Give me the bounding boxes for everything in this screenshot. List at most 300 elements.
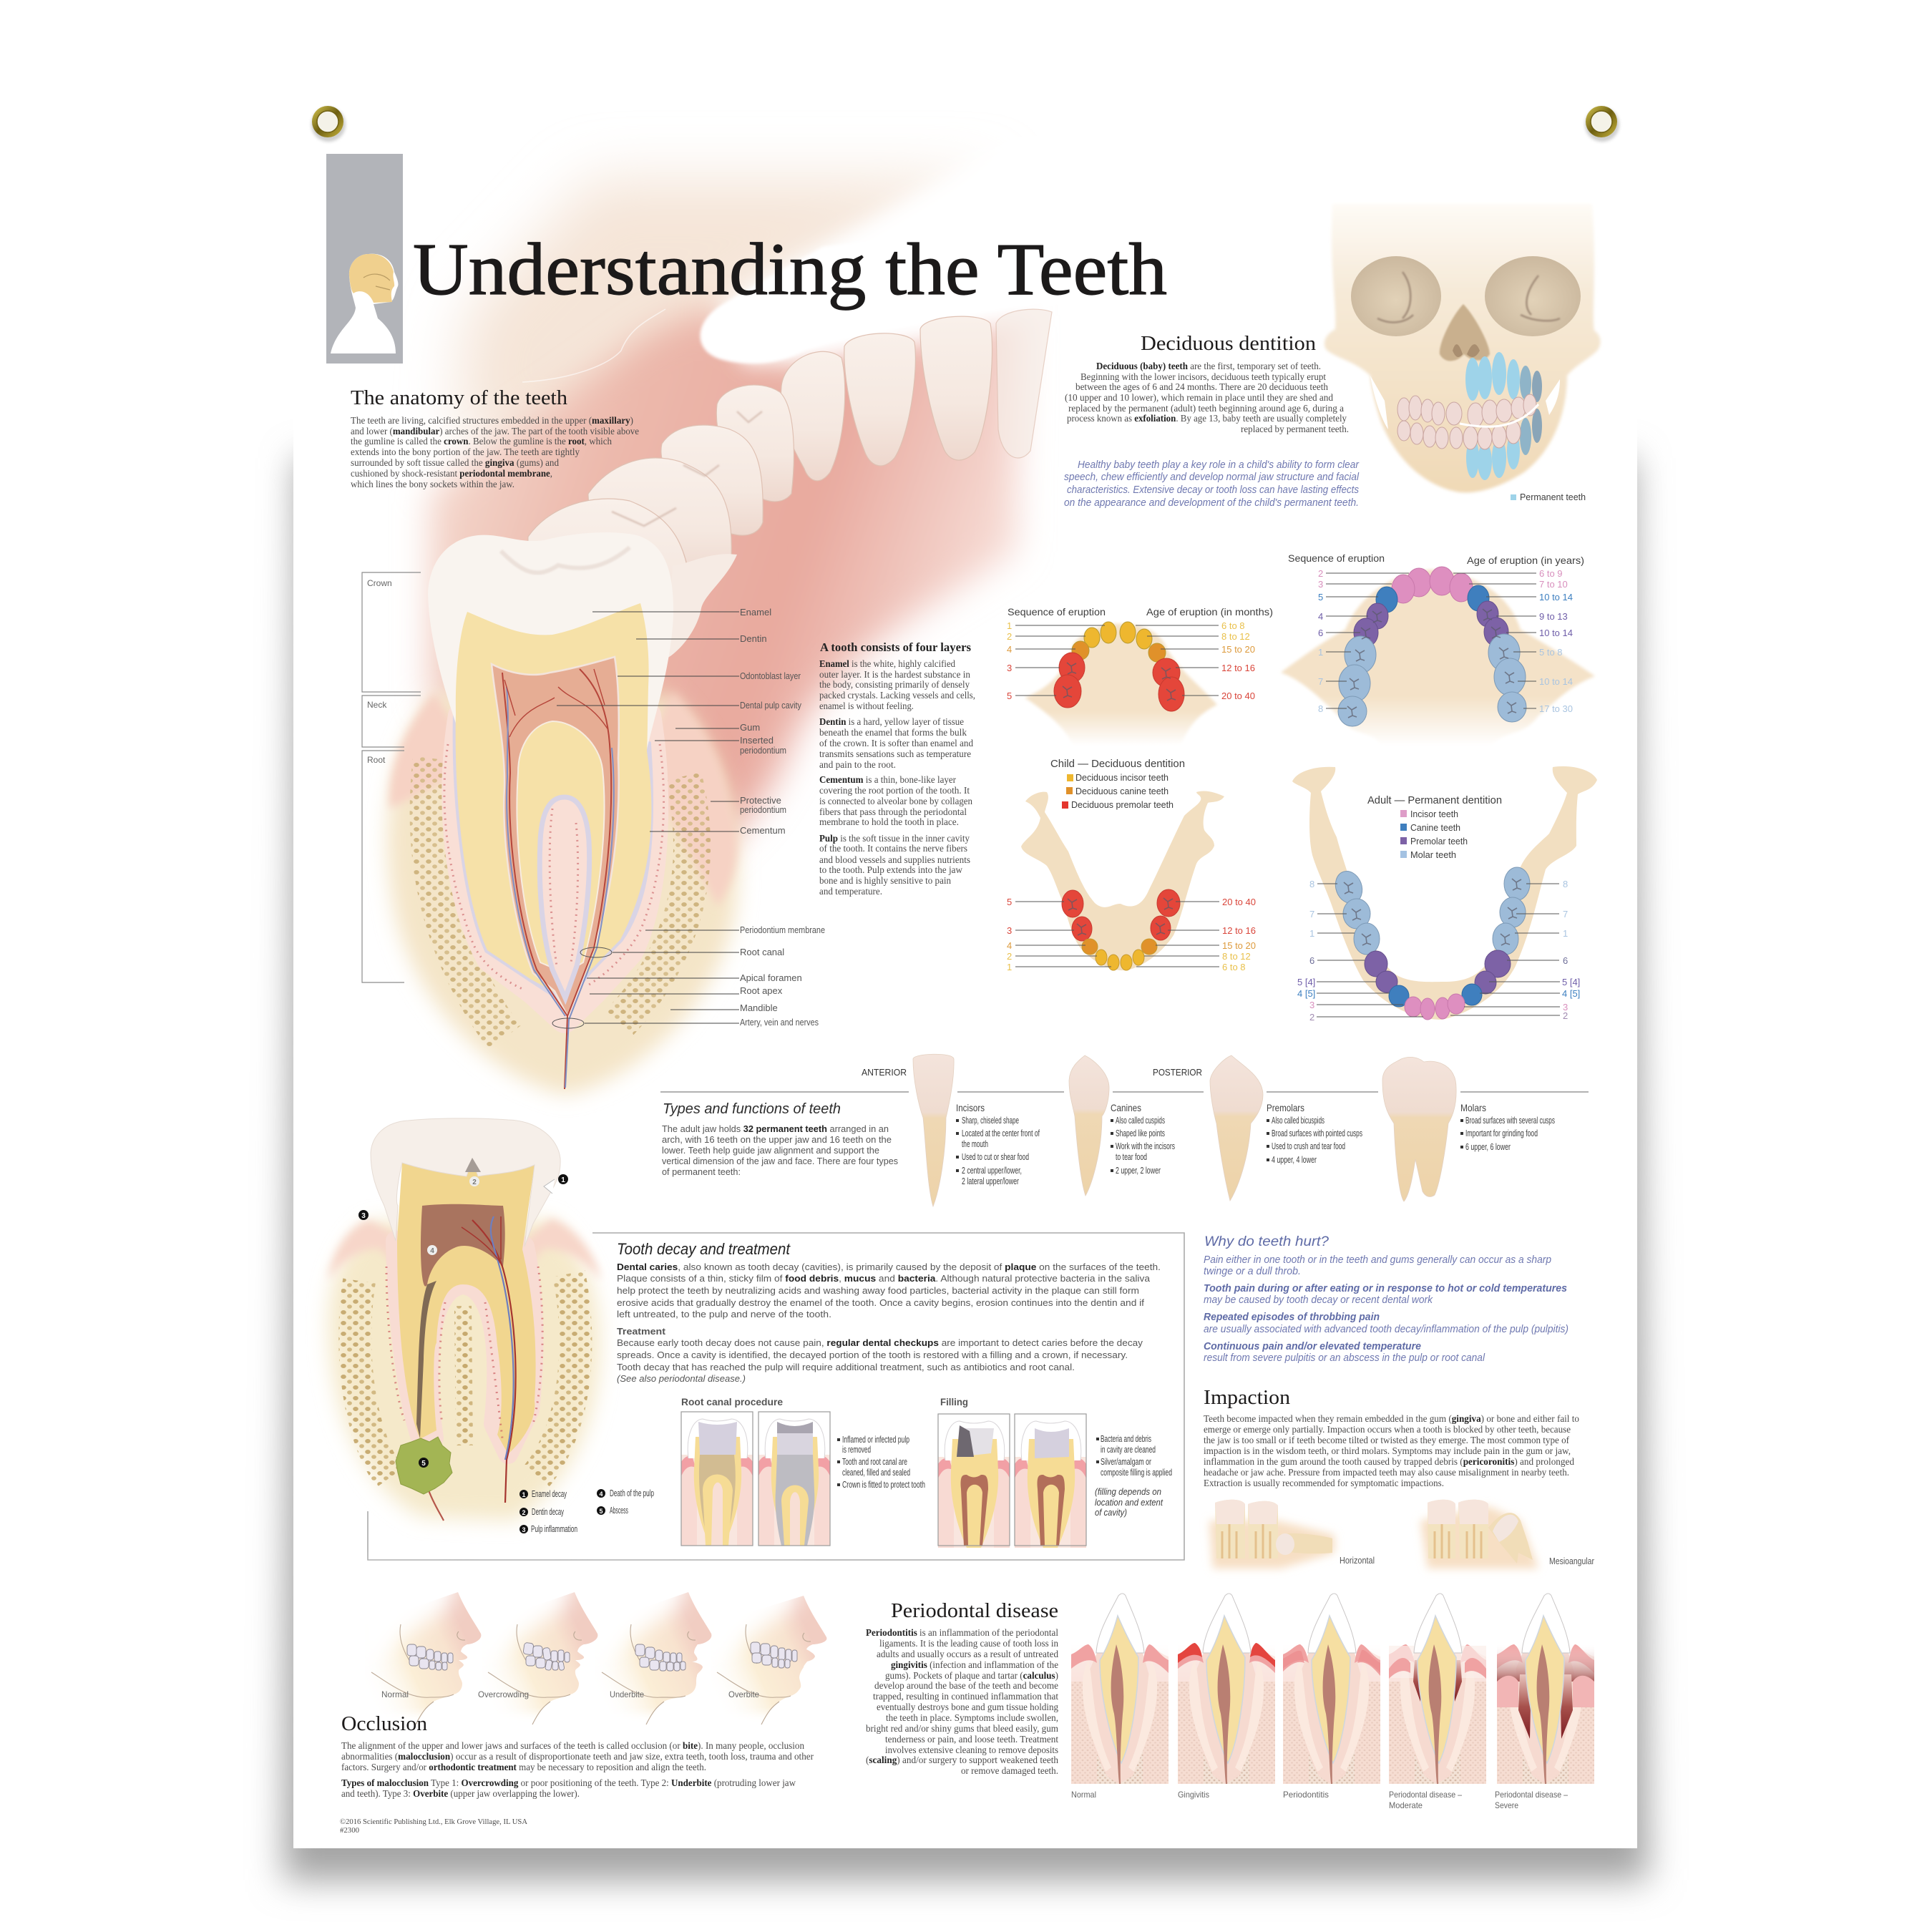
- text: four layers: of the crown. It is softer than enamel and: [819, 738, 973, 749]
- legend: child deciduous dentition: [1050, 758, 1185, 810]
- list: premolars: Premolars: [1267, 1102, 1304, 1113]
- tooth part labels: Gum: [740, 722, 760, 733]
- text: why do teeth hurt: Pain either in one tooth or in the teeth and gums generally can occur as a sharp: [1204, 1254, 1551, 1266]
- ligament fibres: [444, 744, 664, 989]
- list: premolars: Broad surfaces with pointed cusps: [1272, 1128, 1362, 1138]
- chart: adult lower jaw: 1: [1563, 928, 1568, 939]
- panel: filling step 2: [1015, 1414, 1086, 1548]
- chart: child lower jaw: 3: [1007, 925, 1012, 936]
- text: types intro: The adult jaw holds 32 permanent teeth arranged in an: [662, 1123, 889, 1134]
- legend: child deciduous dentition: Deciduous premolar teeth: [1071, 800, 1174, 810]
- chart: adult lower jaw: 5 [4]: [1297, 977, 1315, 987]
- label: mesioangular: Mesioangular: [1549, 1556, 1595, 1566]
- chart: adult lower jaw: 3: [1563, 1002, 1568, 1013]
- tooth part labels: Cementum: [740, 825, 786, 836]
- enamel: [371, 1118, 560, 1246]
- illustration: mesioangular impaction: [1420, 1500, 1538, 1568]
- callouts: 2: [472, 1179, 477, 1186]
- text: four layers: packed crystals. Lacking vessels and cells,: [819, 691, 975, 701]
- legend: adult permanent dentition: Adult — Permanent dentition: [1367, 794, 1502, 806]
- text: four layers: outer layer. It is the hardest substance in: [819, 670, 970, 680]
- chart: adult lower jaw: 6: [1309, 955, 1314, 966]
- tooth part labels: Odontoblast layer: [740, 670, 801, 681]
- text: dental caries: Dental caries , also known as tooth decay (cavities), is primarily caused by the deposit of plaque on the surfaces of the teeth.: [617, 1262, 1161, 1272]
- text: four layers: beneath the enamel that forms the bulk: [819, 728, 967, 738]
- decayed pulp: [421, 1204, 505, 1287]
- panel: moderate: [1389, 1594, 1486, 1784]
- callouts: 4: [430, 1247, 434, 1255]
- inner dentin: [517, 721, 604, 973]
- text: dental caries: [617, 1262, 1161, 1319]
- legend: decay stages: 3: [522, 1526, 526, 1533]
- text: periodontal: involves extensive cleaning to remove deposits: [885, 1745, 1058, 1756]
- text: four layers: [819, 640, 975, 897]
- text: why do teeth hurt: twinge or a dull throb.: [1204, 1266, 1301, 1277]
- chart: child upper jaw: Sequence of eruption: [1008, 607, 1106, 618]
- text: types intro: lower. Teeth help guide jaw alignment and support the: [662, 1145, 879, 1156]
- tooth part labels: Apical foramen: [740, 972, 802, 983]
- list: molars: 6 upper, 6 lower: [1465, 1142, 1511, 1152]
- title: Understanding the Teeth: [413, 228, 1167, 311]
- bracket labels: crown, neck, root: Root: [367, 755, 386, 765]
- callout: baby teeth: speech, chew efficiently and develop normal jaw structure and facial: [1064, 472, 1360, 483]
- text: four layers: to the tooth. Pulp extends into the jaw: [819, 865, 963, 876]
- legend: adult permanent dentition: [1367, 794, 1502, 860]
- tooth part labels: Protective: [740, 795, 781, 806]
- chart: adult upper jaw: 9 to 13: [1539, 611, 1568, 622]
- list: root canal steps: Tooth and root canal are: [842, 1457, 907, 1467]
- tooth part labels: Enamel: [740, 607, 771, 618]
- text: periodontal: eventually destroys bone and gum tissue holding: [877, 1702, 1058, 1713]
- labels: occlusion profiles: Overcrowding: [478, 1689, 529, 1699]
- text: occlusion: and teeth). Type 3: Overbite (upper jaw overlapping the lower).: [341, 1789, 580, 1800]
- heading: occlusion: Occlusion: [341, 1712, 428, 1735]
- chart: adult lower jaw: 7: [1309, 909, 1314, 919]
- chart: child lower jaw: 12 to 16: [1222, 925, 1256, 936]
- list: root canal steps: is removed: [842, 1445, 871, 1455]
- abscess: [396, 1437, 452, 1494]
- tooth part labels: [552, 607, 825, 1028]
- text: four layers: and pain to the root.: [819, 760, 896, 771]
- list: filling steps: in cavity are cleaned: [1101, 1445, 1156, 1455]
- labels: occlusion profiles: [381, 1689, 759, 1699]
- chart: child upper jaw: 6 to 8: [1221, 620, 1245, 631]
- text: impaction: emerge or emerge only partially. Impaction occurs when a tooth is blocked by other teeth, because: [1204, 1425, 1571, 1435]
- list: filling steps: (filling depends on: [1095, 1487, 1161, 1497]
- chart: adult upper jaw: Sequence of eruption: [1288, 553, 1385, 564]
- text: anatomy intro: [351, 416, 639, 490]
- chart: adult lower jaw: 8: [1563, 879, 1568, 889]
- legend: adult permanent dentition: Canine teeth: [1410, 823, 1460, 833]
- list: premolars: 4 upper, 4 lower: [1272, 1155, 1317, 1165]
- legend: decay stages: 2: [522, 1509, 526, 1516]
- chart: adult upper jaw: 7 to 10: [1539, 579, 1568, 590]
- chart: adult upper jaw: 5 to 8: [1539, 647, 1563, 658]
- chart: adult lower jaw: 4 [5]: [1562, 988, 1580, 999]
- text: impaction: impaction is in the wisdom teeth, or third molars. Symptoms may include pain in the gum or jaw,: [1204, 1446, 1571, 1457]
- chart: adult upper jaw: 1: [1318, 647, 1323, 658]
- chart: child upper jaw: 2: [1007, 631, 1012, 642]
- callouts: 1: [561, 1176, 565, 1184]
- panel: periodontal normal: [1071, 1594, 1169, 1784]
- heading: deciduous dentition: Deciduous dentition: [1141, 332, 1317, 355]
- heading: filling: Filling: [940, 1396, 968, 1407]
- list: filling steps: [1095, 1434, 1172, 1518]
- text: deciduous: [1065, 361, 1349, 435]
- list: molars: Molars: [1460, 1102, 1486, 1113]
- text: types intro: arch, with 16 teeth on the upper jaw and 16 teeth on the: [662, 1134, 892, 1145]
- text: treatment: Treatment: [617, 1326, 666, 1337]
- heading: periodontal disease: Periodontal disease: [891, 1599, 1058, 1622]
- text: impaction: inflammation in the gum around the tooth caused by trapped debris (pericoronitis) and prolonged: [1204, 1457, 1574, 1468]
- text: four layers: the body, consisting primarily of densely: [819, 680, 970, 691]
- labels: periodontal stages: Gingivitis: [1178, 1790, 1209, 1800]
- text: why do teeth hurt: result from severe pulpitis or an abscess in the pulp or root canal: [1204, 1352, 1485, 1364]
- text: types intro: vertical dimension of the jaw and face. There are four types: [662, 1156, 898, 1166]
- illustration: occlusion profiles: [343, 1574, 826, 1746]
- list: incisors: 2 lateral upper/lower: [962, 1176, 1019, 1186]
- illustration: horizontal impaction: [1209, 1500, 1335, 1568]
- chart: child upper jaw: 4: [1007, 644, 1012, 655]
- legend: decay stages: Enamel decay: [532, 1489, 567, 1499]
- text: periodontal: (scaling) and/or surgery to support weakened teeth: [866, 1755, 1058, 1766]
- list: root canal steps: Crown is fitted to protect tooth: [842, 1480, 925, 1490]
- chart: adult upper jaw: [1281, 553, 1595, 746]
- illustration: child skull: [1324, 204, 1600, 492]
- section: types and functions of teeth: [660, 1054, 1589, 1206]
- panel: root canal step 1: [681, 1412, 753, 1546]
- text: periodontal: tenderness or pain, and loose teeth. Treatment: [885, 1735, 1058, 1745]
- panel: tooth decay and treatment: [368, 1233, 1184, 1560]
- chart: adult upper jaw: 10 to 14: [1539, 592, 1573, 602]
- bracket labels: crown, neck, root: Crown: [367, 578, 392, 588]
- legend: permanent teeth: Permanent teeth: [1520, 492, 1586, 502]
- chart: child lower jaw: 5: [1007, 897, 1012, 907]
- list: incisors: Sharp, chiseled shape: [962, 1116, 1019, 1126]
- list: canines: to tear food: [1116, 1152, 1147, 1162]
- text: impaction: Teeth become impacted when they remain embedded in the gum (gingiva) or bone and either fail to: [1204, 1414, 1579, 1425]
- vessels: [502, 669, 614, 1089]
- text: anatomy intro: extends into the bony portion of the jaw. The teeth are tightly: [351, 447, 580, 458]
- tooth part labels: Mandible: [740, 1002, 778, 1013]
- tooth: front teeth: [528, 309, 1052, 634]
- list: filling steps: of cavity): [1095, 1508, 1127, 1518]
- legend: child deciduous dentition: Deciduous incisor teeth: [1075, 773, 1169, 783]
- text: types intro: of permanent teeth:: [662, 1166, 741, 1177]
- list: incisors: 2 central upper/lower,: [962, 1166, 1022, 1176]
- text: impaction: the jaw is too small or if teeth become tilted or twisted as they emerge. The most common type of: [1204, 1435, 1569, 1446]
- text: types intro: [662, 1123, 898, 1177]
- labels: periodontal stages: Periodontal disease –: [1389, 1790, 1462, 1800]
- legend: adult permanent dentition: Incisor teeth: [1410, 809, 1458, 819]
- vessels: [428, 1216, 516, 1521]
- chart: child lower jaw: 6 to 8: [1222, 962, 1246, 972]
- copyright: ©2016 Scientific Publishing Ltd., Elk Grove Village, IL USA: [340, 1818, 527, 1826]
- chart: adult upper jaw: 10 to 14: [1539, 676, 1573, 687]
- list: canines: Shaped like points: [1116, 1128, 1165, 1138]
- text: periodontal: ligaments. It is the leading cause of tooth loss in: [879, 1639, 1058, 1649]
- panel: gingivitis: [1178, 1594, 1275, 1784]
- text: anatomy intro: and lower (mandibular) arches of the jaw. The part of the tooth visible above: [351, 426, 639, 437]
- chart: child upper jaw: 15 to 20: [1221, 644, 1255, 655]
- icon: incisor: [913, 1054, 954, 1206]
- text: occlusion: The alignment of the upper and lower jaws and surfaces of the teeth is called occlusion (or bite). In many people, occlusion: [341, 1741, 804, 1752]
- list: filling steps: Bacteria and debris: [1101, 1434, 1151, 1444]
- chart: adult upper jaw: 8: [1318, 703, 1323, 714]
- heading: impaction: Impaction: [1204, 1386, 1291, 1409]
- labels: periodontal stages: Moderate: [1389, 1800, 1423, 1810]
- bone and gum base: [387, 694, 738, 1095]
- labels: periodontal stages: Normal: [1071, 1790, 1096, 1800]
- text: impaction: Extraction is usually recommended for symptomatic impactions.: [1204, 1478, 1444, 1489]
- text: periodontal: gingivitis (infection and inflammation of the: [891, 1660, 1058, 1671]
- dentin: [456, 603, 651, 998]
- chart: adult upper jaw: 4: [1318, 611, 1323, 622]
- text: periodontal: [866, 1628, 1058, 1777]
- panel: severe: [1497, 1594, 1594, 1784]
- chart: child upper jaw: 12 to 16: [1221, 663, 1255, 673]
- chart: adult lower jaw: 4 [5]: [1297, 988, 1315, 999]
- list: molars: Broad surfaces with several cusps: [1465, 1116, 1555, 1126]
- list: filling steps: location and extent: [1095, 1498, 1163, 1508]
- pulp: [492, 657, 619, 1016]
- profile: overbite: [689, 1574, 826, 1746]
- heading: decay: Tooth decay and treatment: [617, 1240, 791, 1258]
- chart: adult lower jaw: 5 [4]: [1562, 977, 1580, 987]
- deciduous teeth: [1397, 394, 1536, 449]
- text: treatment: spreads. Once a cavity is identified, the decayed portion of the tooth is restored with a filling and a crown, if necessary.: [617, 1350, 1128, 1360]
- profile: normal: [343, 1574, 481, 1746]
- legend: child deciduous dentition: Child — Deciduous dentition: [1050, 758, 1185, 770]
- list: premolars: [1267, 1102, 1362, 1165]
- text: four layers: and blood vessels and supplies nutrients: [819, 855, 970, 866]
- labels: periodontal stages: Periodontitis: [1283, 1790, 1329, 1800]
- text: four layers: Pulp is the soft tissue in the inner cavity: [819, 834, 970, 844]
- text: deciduous: replaced by permanent teeth.: [1241, 424, 1349, 435]
- chart: child upper jaw: 8 to 12: [1221, 631, 1250, 642]
- grommet right: [1585, 106, 1619, 142]
- enamel crown: [667, 554, 737, 658]
- panel: root canal step 2: [758, 1412, 830, 1546]
- list: root canal steps: cleaned, filled and sealed: [842, 1468, 910, 1478]
- copyright: #2300: [340, 1826, 359, 1835]
- callout: baby teeth: [1064, 459, 1360, 509]
- legend: decay stages: Abscess: [610, 1506, 628, 1516]
- text: periodontal: the teeth in place. Symptoms include swollen,: [886, 1713, 1058, 1724]
- legend: decay stages: 1: [522, 1491, 526, 1498]
- text: four layers: and temperature.: [819, 887, 882, 897]
- list: premolars: Used to crush and tear food: [1272, 1141, 1345, 1151]
- chart: adult lower jaw: 1: [1309, 928, 1314, 939]
- bone speckles: [430, 758, 692, 1038]
- chart: adult lower jaw: 8: [1309, 879, 1314, 889]
- heading: root canal procedure: Root canal procedure: [681, 1396, 783, 1407]
- legend: decay stages: Dentin decay: [532, 1507, 564, 1517]
- chart: child lower jaw: 20 to 40: [1222, 897, 1256, 907]
- text: anatomy intro: the gumline is called the crown. Below the gumline is the root, which: [351, 436, 612, 447]
- legend: decay stages: 4: [599, 1491, 603, 1498]
- tooth part labels: Root apex: [740, 985, 783, 996]
- illustration: decayed tooth: [328, 1118, 601, 1521]
- text: four layers: Enamel is the white, highly calcified: [819, 659, 955, 670]
- tooth part labels: periodontium: [740, 745, 786, 756]
- callout: baby teeth: characteristics. Extensive decay or tooth loss can have lasting effects: [1067, 484, 1359, 496]
- heading: anatomy: The anatomy of the teeth: [351, 386, 568, 409]
- list: molars: [1460, 1102, 1555, 1152]
- poster shadow: [283, 458, 1649, 1880]
- chart: adult lower jaw: 6: [1563, 955, 1568, 966]
- list: root canal steps: [837, 1435, 925, 1490]
- legend: decay stages: Pulp inflammation: [531, 1524, 577, 1534]
- tooth part labels: Root canal: [740, 947, 784, 957]
- list: canines: Canines: [1111, 1102, 1141, 1113]
- text: dental caries: help protect the teeth by neutralizing acids and washing away food particles, bacterial activity in the plaque can still form: [617, 1285, 1139, 1296]
- chart: adult upper jaw: 2: [1318, 568, 1323, 579]
- text: deciduous: (10 upper and 10 lower), which remain in place until they are shed and: [1065, 393, 1333, 404]
- illustration: gum and molar row: [429, 136, 1145, 852]
- body location icon: [326, 154, 403, 364]
- chart: child lower jaw: [1007, 791, 1256, 972]
- text: deciduous: replaced by the permanent (adult) teeth beginning around age 6, during a: [1068, 404, 1345, 414]
- callouts: 5: [421, 1460, 426, 1468]
- text: dental caries: left untreated, to the pulp and nerve of the tooth.: [617, 1309, 831, 1319]
- chart: child upper jaw: 3: [1007, 663, 1012, 673]
- text: periodontal: or remove damaged teeth.: [961, 1766, 1058, 1777]
- interradicular tissue: [540, 797, 590, 998]
- text: why do teeth hurt: Tooth pain during or after eating or in response to hot or cold temperatures: [1204, 1283, 1567, 1294]
- icon: molar: [1382, 1057, 1456, 1201]
- poster sheet: [293, 57, 1637, 1848]
- callout: baby teeth: on the appearance and development of the child's permanent teeth.: [1064, 497, 1359, 509]
- labels: periodontal stages: [1071, 1790, 1568, 1810]
- list: incisors: Incisors: [956, 1102, 985, 1113]
- chart: adult lower jaw: 3: [1309, 1000, 1314, 1010]
- chart: adult upper jaw: 10 to 14: [1539, 628, 1573, 638]
- text: why do teeth hurt: Continuous pain and/or elevated temperature: [1204, 1341, 1421, 1352]
- bracket labels: crown, neck, root: [362, 572, 421, 982]
- chart: child lower jaw: 1: [1007, 962, 1012, 972]
- list: canines: [1111, 1102, 1175, 1176]
- text: occlusion: [341, 1741, 814, 1800]
- text: four layers: fibers that pass through the periodontal: [819, 807, 967, 818]
- labels: occlusion profiles: Normal: [381, 1689, 409, 1699]
- list: incisors: Used to cut or shear food: [962, 1152, 1029, 1162]
- chart: child upper jaw: 20 to 40: [1221, 691, 1255, 701]
- text: occlusion: factors. Surgery and/or orthodontic treatment may be necessary to reposition and align the teeth.: [341, 1762, 706, 1773]
- text: deciduous: process known as exfoliation. By age 13, baby teeth are usually completely: [1067, 414, 1347, 424]
- icon: canine: [1069, 1055, 1109, 1196]
- list: incisors: Located at the center front of: [962, 1128, 1040, 1138]
- text: periodontal: trapped, resulting in continued inflammation that: [873, 1692, 1058, 1702]
- chart: adult lower jaw: 2: [1563, 1010, 1568, 1021]
- illustration: tooth cross-section: [387, 532, 738, 1095]
- labels: periodontal stages: Periodontal disease –: [1495, 1790, 1568, 1800]
- middle bone: [463, 1306, 464, 1445]
- text: why do teeth hurt: may be caused by tooth decay or recent dental work: [1204, 1294, 1433, 1306]
- text: anatomy intro: surrounded by soft tissue called the gingiva (gums) and: [351, 458, 559, 469]
- tooth part labels: periodontium: [740, 804, 786, 815]
- tooth part labels: Periodontium membrane: [740, 924, 825, 935]
- list: premolars: Also called bicuspids: [1272, 1116, 1324, 1126]
- text: four layers: A tooth consists of four layers: [820, 640, 971, 654]
- chart: adult upper jaw: 6: [1318, 628, 1323, 638]
- list: incisors: the mouth: [962, 1139, 988, 1149]
- callouts: [358, 1174, 568, 1468]
- legend: child deciduous dentition: Deciduous canine teeth: [1075, 786, 1169, 796]
- text: anatomy intro: which lines the bony sockets within the jaw.: [351, 479, 514, 490]
- chart: adult upper jaw: 5: [1318, 592, 1323, 602]
- panel: periodontitis: [1283, 1594, 1380, 1784]
- text: deciduous: Beginning with the lower incisors, deciduous teeth typically erupt: [1080, 372, 1326, 383]
- legend: decay stages: Death of the pulp: [610, 1488, 654, 1498]
- tooth part labels: Artery, vein and nerves: [740, 1017, 819, 1028]
- tooth part labels: Dentin: [740, 633, 767, 644]
- text: impaction: headache or jaw ache. Pressure from impacted teeth may also cause misalignment in nearby teeth.: [1204, 1468, 1569, 1478]
- list: root canal steps: Inflamed or infected pulp: [842, 1435, 909, 1445]
- label: horizontal: Horizontal: [1340, 1555, 1375, 1566]
- text: anatomy intro: cushioned by shock-resistant periodontal membrane,: [351, 469, 552, 479]
- text: treatment: Because early tooth decay does not cause pain, regular dental checkups are important to detect caries before the decay: [617, 1337, 1143, 1348]
- periodontal ligament: [455, 716, 655, 1020]
- text: anatomy intro: The teeth are living, calcified structures embedded in the upper (maxillary): [351, 416, 633, 426]
- text: four layers: Dentin is a hard, yellow layer of tissue: [819, 717, 964, 728]
- chart: adult upper jaw: 3: [1318, 579, 1323, 590]
- text: why do teeth hurt: [1204, 1234, 1568, 1364]
- grommet left: [311, 106, 346, 142]
- text: deciduous: between the ages of 6 and 24 months. There are 20 deciduous teeth: [1075, 382, 1328, 393]
- section: types and functions of teeth: ANTERIOR: [862, 1067, 907, 1078]
- text: four layers: Cementum is a thin, bone-like layer: [819, 775, 956, 786]
- panel: filling step 1: [938, 1414, 1010, 1548]
- text: impaction: [1204, 1414, 1579, 1489]
- chart: child lower jaw: 4: [1007, 940, 1012, 951]
- text: four layers: membrane to hold the tooth in place.: [819, 817, 959, 828]
- chart: adult upper jaw: Age of eruption (in years): [1467, 555, 1584, 566]
- text: four layers: transmits sensations such as temperature: [819, 749, 971, 760]
- legend: decay stages: [519, 1488, 654, 1534]
- chart: child upper jaw: 1: [1007, 620, 1012, 631]
- text: why do teeth hurt: are usually associated with advanced tooth decay/inflammation of the pulp (pulpitis): [1204, 1324, 1568, 1335]
- profile: underbite: [574, 1574, 711, 1746]
- list: canines: Work with the incisors: [1116, 1141, 1175, 1151]
- chart: child lower jaw: 15 to 20: [1222, 940, 1256, 951]
- tooth part labels: Inserted: [740, 735, 774, 746]
- chart: adult upper jaw: 17 to 30: [1539, 703, 1573, 714]
- chart: child upper jaw: Age of eruption (in months): [1146, 607, 1273, 618]
- text: periodontal: adults and usually occurs as a result of untreated: [877, 1649, 1058, 1660]
- text: occlusion: Types of malocclusion Type 1: Overcrowding or poor positioning of the teeth. Type 2: Underbite (protruding lower jaw: [341, 1778, 796, 1789]
- chart: child upper jaw: [1007, 607, 1273, 746]
- bracket labels: crown, neck, root: Neck: [367, 700, 387, 710]
- text: dental caries: Plaque consists of a thin, sticky film of food debris , mucus and bacteria. Although natural protective bacteria in the saliva: [617, 1273, 1151, 1284]
- legend: adult permanent dentition: Premolar teeth: [1410, 836, 1468, 847]
- callouts: 3: [361, 1212, 366, 1220]
- text: occlusion: abnormalities (malocclusion) occur as a result of disproportionate teeth and jaw size, extra teeth, tooth loss, trauma and other: [341, 1752, 814, 1762]
- text: four layers: covering the root portion of the tooth. It: [819, 786, 970, 796]
- labels: occlusion profiles: Overbite: [728, 1689, 759, 1699]
- chart: adult lower jaw: 2: [1309, 1012, 1314, 1023]
- text: periodontal: develop around the base of the teeth and become: [874, 1681, 1058, 1692]
- labels: periodontal stages: Severe: [1495, 1800, 1518, 1810]
- list: filling steps: Silver/amalgam or: [1101, 1457, 1151, 1467]
- chart: child lower jaw: 8 to 12: [1222, 951, 1251, 962]
- list: canines: 2 upper, 2 lower: [1116, 1166, 1161, 1176]
- chart: child lower jaw: 2: [1007, 951, 1012, 962]
- copyright: [340, 1818, 527, 1835]
- chart: adult lower jaw: 7: [1563, 909, 1568, 919]
- text: deciduous: Deciduous (baby) teeth are the first, temporary set of teeth.: [1096, 361, 1321, 372]
- heading: types: Types and functions of teeth: [663, 1101, 841, 1117]
